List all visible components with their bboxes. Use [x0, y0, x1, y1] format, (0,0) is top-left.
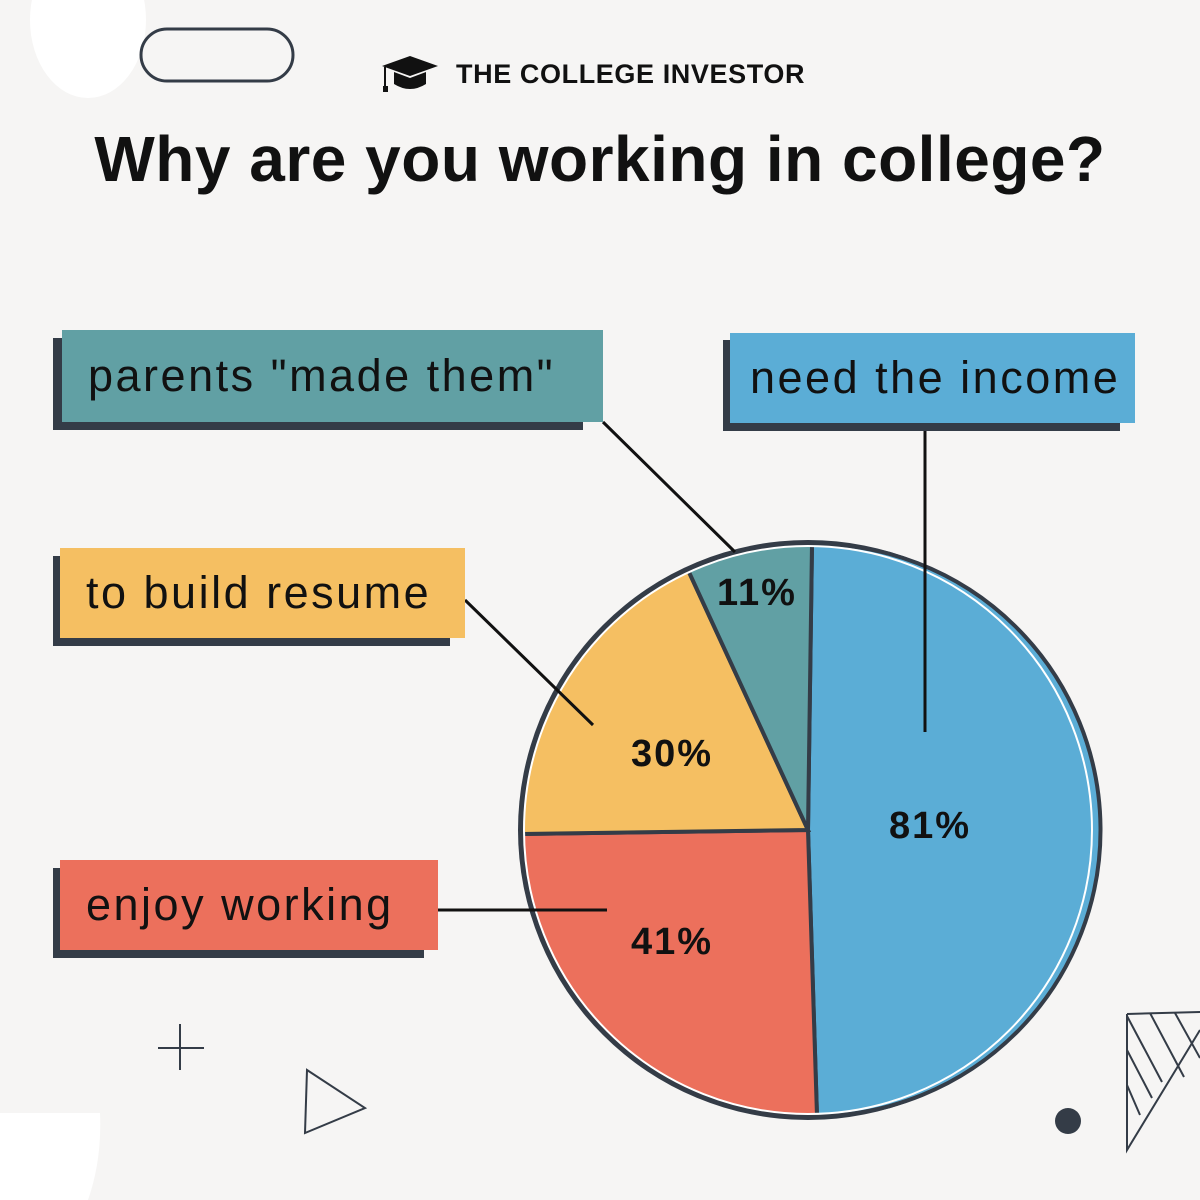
label: enjoy [53, 860, 438, 958]
pie chart: 30% [631, 733, 713, 775]
pie chart: 41% [631, 921, 713, 963]
pie chart: 11% [717, 572, 797, 614]
label: enjoy: enjoy working [86, 879, 394, 930]
label: resume [53, 548, 465, 646]
logo [382, 56, 805, 92]
label: parents: parents "made them" [88, 350, 555, 401]
title: Why are you working in college? [94, 123, 1106, 195]
label: need income: need the income [750, 352, 1120, 403]
label: parents [53, 330, 603, 430]
pie chart: 81% [889, 805, 971, 847]
logo: THE COLLEGE INVESTOR [456, 58, 805, 88]
label: resume: to build resume [86, 567, 431, 618]
label: need income [723, 333, 1135, 431]
